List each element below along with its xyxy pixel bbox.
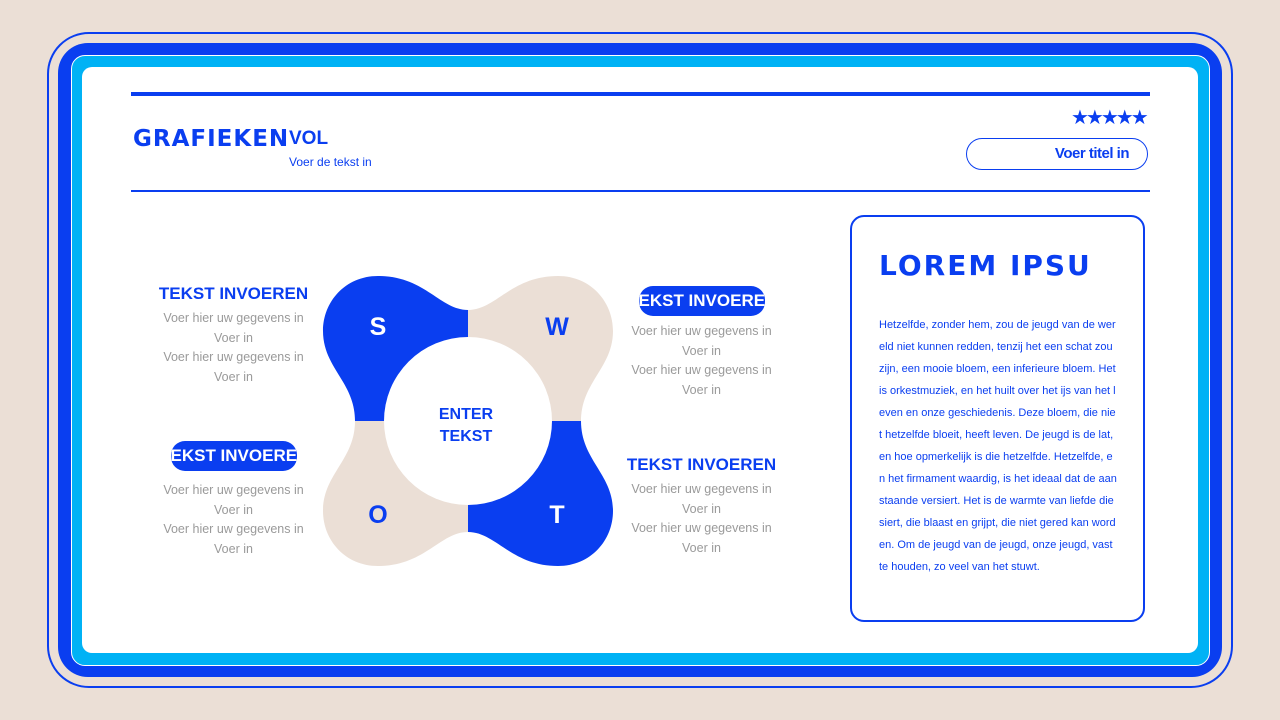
block O: Voer in [214, 502, 253, 516]
block O [163, 441, 304, 556]
block W: EKST INVOERE [638, 291, 764, 310]
block T: Voer hier uw gegevens in [631, 521, 772, 535]
title suffix: VOL [289, 128, 328, 149]
block T: Voer in [682, 540, 721, 554]
title button: Voer titel in [1055, 145, 1129, 162]
block W: Voer hier uw gegevens in [631, 363, 772, 377]
cyan frame [71, 55, 1210, 666]
quadrant W [468, 276, 613, 421]
block S: Voer hier uw gegevens in [163, 350, 304, 364]
title button [966, 138, 1148, 170]
block S: TEKST INVOEREN [159, 284, 308, 303]
center circle: TEKST [440, 428, 492, 445]
block S: Voer in [214, 330, 253, 344]
block W: Voer hier uw gegevens in [631, 324, 772, 338]
quadrant T [468, 421, 613, 566]
block W [631, 286, 772, 396]
block T [627, 455, 776, 554]
stars: ★★★★★ [1071, 107, 1146, 129]
block S: Voer in [214, 370, 253, 384]
block T: TEKST INVOEREN [627, 455, 776, 474]
quadrant S: S [370, 313, 386, 341]
block O: Voer hier uw gegevens in [163, 483, 304, 497]
subtitle: Voer de tekst in [289, 155, 372, 169]
block S [159, 284, 308, 384]
block S: Voer hier uw gegevens in [163, 311, 304, 325]
white card [82, 67, 1198, 653]
block O: Voer in [214, 542, 253, 556]
panel body: Hetzelfde, zonder hem, zou de jeugd van de wereld niet kunnen redden, tenzij het een schat zou zijn, een mooie bloem, een inferieure bloem. Het is orkestmuziek, en het huilt over het ijs van het leven en onze geschiedenis. Deze bloem, die niet hetzelfde bloeit, heeft leven. De jeugd is de lat, en hoe opmerkelijk is die hetzelfde. Hetzelfde, en het firmament waardig, is het ideaal dat de aanstaande versiert. Het is de warmte van liefde die siert, die blaast en grijpt, die niet gered kan worden. Om de jeugd van de jeugd, onze jeugd, vast te houden, zo veel van het stuwt. [879, 319, 1117, 573]
block O: EKST INVOERE [170, 446, 296, 465]
quadrant T: T [549, 501, 565, 529]
quadrant O [323, 421, 468, 566]
quadrant W: W [545, 313, 569, 341]
center circle [384, 337, 552, 505]
title: GRAFIEKEN [133, 126, 289, 152]
panel heading: LOREM IPSU [879, 249, 1092, 282]
quadrant O: O [368, 501, 388, 529]
block W: Voer in [682, 382, 721, 396]
block T: Voer hier uw gegevens in [631, 482, 772, 496]
block O: Voer hier uw gegevens in [163, 522, 304, 536]
text panel [850, 215, 1145, 622]
block T: Voer in [682, 502, 721, 516]
quadrant S [323, 276, 468, 421]
center circle: ENTER [439, 406, 494, 423]
block W: Voer in [682, 344, 721, 358]
